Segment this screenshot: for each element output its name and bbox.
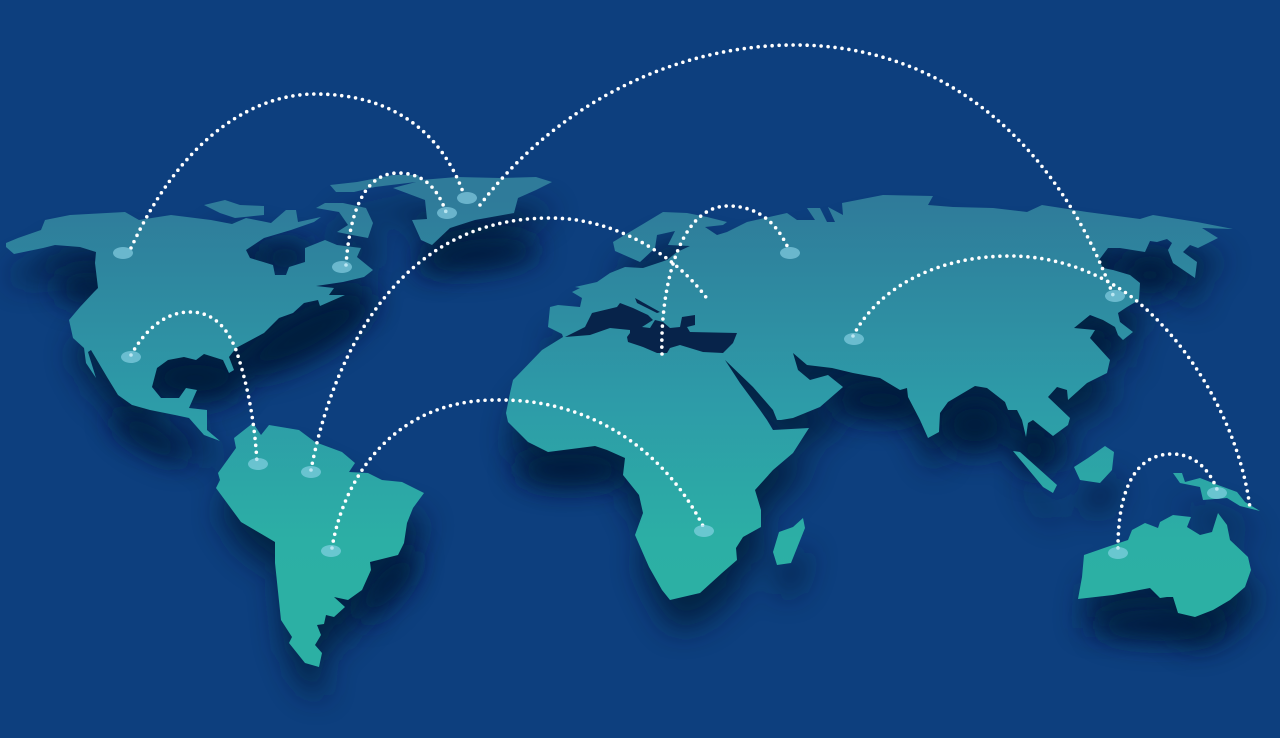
- arc: eastern Canada to Greenland: [346, 173, 446, 265]
- location markers: [113, 192, 1227, 559]
- arc: Australia to New Guinea: [1118, 454, 1218, 548]
- route arcs: [131, 45, 1250, 548]
- arc: Mediterranean to Russia: [662, 206, 789, 354]
- land masses: [6, 175, 1260, 667]
- localized deep shadows: [54, 233, 1225, 641]
- inland seas: [565, 298, 737, 353]
- arc: South America to Europe: [311, 218, 708, 470]
- arc: Brazil to southern Africa: [332, 400, 704, 548]
- continent drop shadows: [10, 205, 1264, 697]
- arc: Central Asia to New Guinea: [853, 256, 1250, 508]
- arc: Canada to Greenland: [131, 94, 463, 248]
- arc: Greenland to East Asia: [480, 45, 1113, 295]
- arc: Mexico to northern South America: [131, 312, 257, 463]
